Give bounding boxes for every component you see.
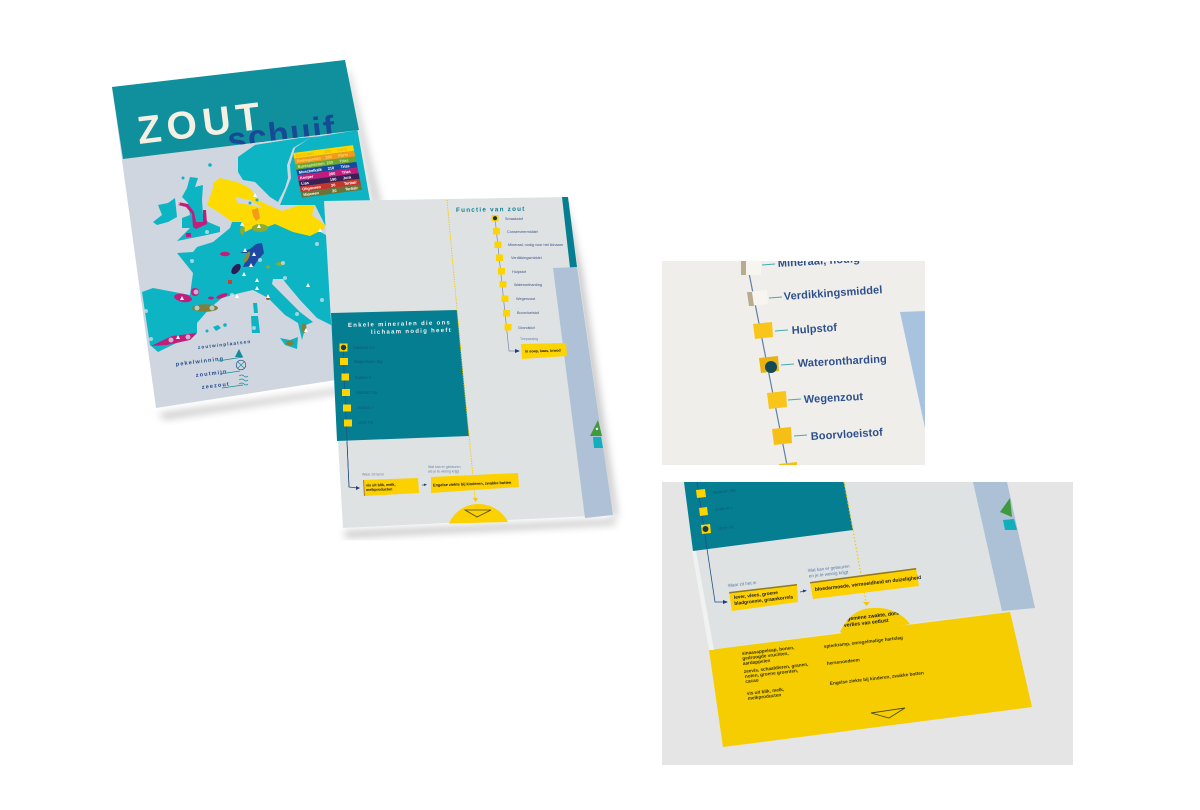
yellow slider sheet: spierkramp, onregelmatige hartslag <box>824 635 903 649</box>
dotted yellow guide line <box>447 200 475 498</box>
function labels <box>777 253 887 443</box>
mineral labels: Kalium K <box>355 375 372 380</box>
yellow slider sheet: melkproducten <box>748 692 782 701</box>
geological time table: Mioceen <box>303 190 320 197</box>
mineral labels: Natrium Na <box>356 390 378 395</box>
yellow slider sheet: Engelse ziekte bij kinderen, zwakke botten <box>830 670 924 686</box>
mineral labels <box>353 345 383 425</box>
geological time table: 20 <box>332 188 338 193</box>
yellow slider sheet: cacao <box>745 678 759 684</box>
function labels: Wegenzout <box>804 391 864 406</box>
geological time table: Trias <box>341 169 352 175</box>
yellow thumb tab with triangle <box>449 504 508 524</box>
yellow slider sheet: sinaasappelsap, bonen, <box>742 645 795 656</box>
panel heading: lichaam nodig heeft <box>371 328 452 336</box>
yellow slider sheet: vis uit blik, melk, <box>747 687 784 696</box>
geological time table: 30 <box>331 182 337 188</box>
map legend <box>176 339 252 391</box>
lower windows with arrows: Waar zit het in <box>362 472 384 476</box>
lower windows with arrows: Wat kan er gebeuren <box>428 465 461 469</box>
mineral selector squares <box>340 344 352 426</box>
geological time table: 200 <box>328 171 336 177</box>
function list with squares: Waterontharding <box>514 283 542 287</box>
function labels: Verdikkingsmiddel <box>783 284 883 303</box>
mineral labels: Calcium Ca <box>353 345 375 350</box>
panel heading: Enkele mineralen die ons <box>348 320 451 329</box>
function labels: Boorvloeistof <box>810 427 883 443</box>
mineral squares: Natrium Na <box>713 488 736 495</box>
thumb tab circle window: algemene zwakte, dorst, & <box>843 610 908 623</box>
yellow slider sheet: gedroogde vruchten, <box>742 651 789 661</box>
mineral squares <box>696 482 736 604</box>
geological time table: Muschelkalk <box>298 167 323 175</box>
function list with squares: Toepassing <box>520 337 538 341</box>
lower windows with arrows: melkproducten <box>366 487 393 492</box>
geological time table: Tertiair <box>345 185 359 192</box>
yellow slider sheet: zeevis, schaaldieren, granen, <box>744 662 809 674</box>
function list with squares: Mineraal, nodig voor het lichaam <box>508 243 563 247</box>
geological time table: Tertiair <box>343 179 358 186</box>
geological time table: Oligoceen <box>302 184 322 192</box>
windows with iron information: en je te weinig krijgt <box>809 569 849 578</box>
function list with squares: Conserveermiddel <box>507 230 538 234</box>
geological time table: Buntsandstein <box>297 161 326 169</box>
round salt-mine markers <box>144 201 324 342</box>
blue-grey strip <box>553 267 613 518</box>
house icon peek <box>590 420 603 448</box>
function labels: Waterontharding <box>798 353 887 370</box>
geological time table: Rotliegendes <box>296 155 322 164</box>
booklet: open page with minerals and salt functions <box>324 197 618 537</box>
yellow slider sheet: hersenoedeem <box>827 657 860 666</box>
result window: soup, cheese, bread: in soep, kaas, brood <box>525 349 561 353</box>
dotted yellow line <box>844 482 866 602</box>
cover title band: ZOUT <box>135 95 268 153</box>
punched squares <box>741 260 797 470</box>
lower windows with arrows: vis uit blik, melk, <box>366 483 396 487</box>
function labels: Hulpstof <box>791 322 838 337</box>
geological time table: 280 <box>325 154 333 160</box>
lower windows with arrows: Engelse ziekte bij kinderen, zwakke botten <box>433 480 512 487</box>
geological time table: Trias <box>339 157 350 164</box>
panel heading <box>348 320 452 336</box>
map legend: zoutmijn <box>196 369 228 379</box>
geological time table: 210 <box>327 165 335 171</box>
thumb tab circle window <box>840 608 910 636</box>
yellow slider sheet: aardappelen <box>743 658 771 666</box>
windows with iron information: lever, vlees, groene <box>734 590 779 601</box>
function list with squares: Verdikkingsmiddel <box>511 256 542 260</box>
geological time table: 250 <box>324 148 332 154</box>
function labels: Mineraal, nodig <box>777 253 860 270</box>
function list with squares: Hulpstof <box>512 270 527 274</box>
connector lines <box>762 264 807 436</box>
function list with squares: Grondstof <box>518 326 536 330</box>
windows with iron information: bladgroente, graankorrels <box>734 594 794 607</box>
yellow slider sheet <box>709 612 1032 747</box>
lower windows with arrows <box>347 442 519 496</box>
mineral labels: Magnesium Mg <box>354 359 383 364</box>
heading: Functie van zout: Functie van zout <box>456 206 526 214</box>
white triangle markers <box>176 193 322 339</box>
geological time table: Trias <box>340 163 351 169</box>
function list with squares: Wegenzout <box>516 297 536 301</box>
geological time table: 190 <box>329 176 338 182</box>
geological time table: Perm <box>338 152 349 158</box>
windows with iron information: Wat kan er gebeuren <box>808 564 850 573</box>
booklet: Zout schuif cover with map of Europe <box>112 60 400 419</box>
geological time table: Lias <box>301 180 310 186</box>
result window: soup, cheese, bread <box>521 343 567 359</box>
white page over slider <box>684 482 1035 650</box>
function list with squares: Smaakstof <box>505 217 524 221</box>
geological time table: 230 <box>326 159 334 165</box>
function list with squares: Boorvloeistof <box>517 311 540 315</box>
geological time table <box>293 145 362 198</box>
mineral labels: Jodium I <box>357 405 373 410</box>
windows with iron information: bloedarmoede, vermoeidheid en duizeligheid <box>815 575 922 593</box>
photo: close-up of function list <box>662 253 925 470</box>
lower windows with arrows: als je te weinig krijgt <box>428 470 459 474</box>
map legend: zeezout <box>202 382 230 391</box>
map legend: zoutwinplaatsen <box>198 339 252 351</box>
salt regions <box>252 208 260 221</box>
cover title band: schuif <box>225 109 338 160</box>
geological time table: Jura <box>342 174 352 180</box>
mineral squares: IJzer Fe <box>718 524 735 531</box>
thumb tab circle window: verlies van eetlust <box>844 618 889 629</box>
windows with iron information: Waar zit het in <box>728 580 757 588</box>
geological time table: Keuper <box>300 174 314 180</box>
yellow salt basin <box>207 178 325 236</box>
geological time table: Zechstein <box>295 151 315 158</box>
mineral squares: Jodium I <box>715 505 732 512</box>
map legend: pekelwinning <box>176 356 225 368</box>
yellow slider sheet: noten, groene groenten, <box>745 668 798 679</box>
teal side strip <box>562 197 577 268</box>
function list with squares <box>492 215 567 359</box>
cover title band <box>112 60 359 160</box>
map of Europe <box>142 130 390 352</box>
photo: slider pulled out of the booklet <box>662 482 1073 765</box>
geological time table: Perm <box>337 146 348 152</box>
teal panel: minerals <box>331 310 469 487</box>
mineral labels: IJzer Fe <box>358 420 374 425</box>
windows with iron information <box>728 564 922 611</box>
